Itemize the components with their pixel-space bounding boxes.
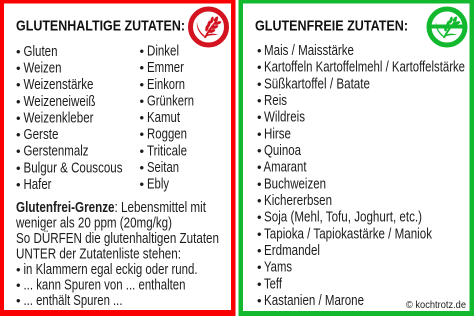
list: glutenfreie Zutaten: • <box>257 226 262 241</box>
list: glutenhaltig column 1: Gerstenmalz <box>24 143 88 160</box>
list: glutenhaltig column 1: • <box>16 44 21 59</box>
list: glutenhaltig column 1: • <box>16 77 21 92</box>
list: glutenhaltig column 2: Grünkern <box>147 92 194 109</box>
list: glutenfreie Zutaten: Teff <box>264 275 283 292</box>
list: glutenhaltig column 1: • <box>16 127 21 142</box>
list: glutenhaltig column 1: Weizen <box>24 60 62 77</box>
list: glutenfreie Zutaten: • <box>257 260 262 275</box>
list: glutenfreie Zutaten: Süßkartoffel / Batate <box>264 75 370 92</box>
panel: glutenhaltige Zutaten <box>0 0 236 316</box>
list: glutenfreie Zutaten: • <box>257 293 262 308</box>
text block: Glutenfrei-Grenze: ... kann Spuren von ... enthalten <box>24 278 186 294</box>
list: glutenhaltig column 1: Gluten <box>24 43 58 60</box>
list: glutenhaltig column 2: • <box>140 177 144 192</box>
list: glutenhaltig column 1: • <box>16 61 21 76</box>
list: glutenfreie Zutaten: • <box>257 243 262 258</box>
panel: glutenfreie Zutaten <box>238 0 474 316</box>
list: glutenfreie Zutaten: Kichererbsen <box>264 192 332 209</box>
list: glutenhaltig column 2: • <box>140 143 144 158</box>
list: glutenfreie Zutaten: • <box>257 76 262 91</box>
list: glutenfreie Zutaten: Buchweizen <box>264 175 326 192</box>
list: glutenfreie Zutaten: Erdmandel <box>264 242 320 259</box>
list: glutenhaltig column 2: Ebly <box>147 176 169 193</box>
list: glutenfreie Zutaten: • <box>257 110 262 125</box>
icon: crossed-out wheat green <box>428 9 466 45</box>
list: glutenfreie Zutaten: • <box>257 193 262 208</box>
list: glutenhaltig column 2: Dinkel <box>147 42 179 60</box>
list: glutenfreie Zutaten: • <box>257 60 262 75</box>
list: glutenhaltig column 2: • <box>140 60 144 75</box>
list: glutenhaltig column 2: • <box>140 93 144 108</box>
list: glutenhaltig column 1: • <box>16 160 21 175</box>
text block: Glutenfrei-Grenze <box>15 200 219 309</box>
list: glutenhaltig column 2: • <box>140 110 144 125</box>
text block: Glutenfrei-Grenze: So DÜRFEN die glutenhaltigen Zutaten <box>16 229 219 247</box>
list: glutenfreie Zutaten <box>257 42 466 311</box>
list: glutenfreie Zutaten: • <box>257 160 262 175</box>
list: glutenhaltig column 2: Emmer <box>147 59 184 76</box>
list: glutenhaltig column 2: Seitan <box>147 159 179 176</box>
list: glutenhaltig column 2: • <box>140 44 144 58</box>
text block: Glutenfrei-Grenze: in Klammern egal eckig oder rund. <box>24 262 198 278</box>
list: glutenhaltig column 2: • <box>140 77 144 92</box>
list: glutenfreie Zutaten: Soja (Mehl, Tofu, Joghurt, etc.) <box>264 209 422 226</box>
list: glutenhaltig column 2: Triticale <box>147 142 187 159</box>
list: glutenhaltig column 1: • <box>16 94 21 109</box>
text block: Glutenfrei-Grenze: • <box>16 262 21 277</box>
heading: glutenfreie Zutaten: GLUTENFREIE ZUTATEN: <box>255 18 408 34</box>
list: glutenfreie Zutaten: Quinoa <box>264 142 301 159</box>
list: glutenhaltig column 1: • <box>16 110 21 126</box>
list: glutenhaltig column 2: • <box>140 160 144 175</box>
list: glutenfreie Zutaten: • <box>257 126 262 141</box>
list: glutenfreie Zutaten: • <box>257 93 262 108</box>
list: glutenhaltig column 1: Weizeneiweiß <box>24 93 96 110</box>
list: glutenhaltig column 2: Einkorn <box>147 76 185 93</box>
copyright: © kochtrotz.de <box>406 299 466 311</box>
list: glutenhaltig column 2 <box>140 42 194 193</box>
list: glutenfreie Zutaten: • <box>257 210 262 225</box>
list: glutenhaltig column 1: Hafer <box>24 176 52 193</box>
list: glutenfreie Zutaten: • <box>257 143 262 158</box>
list: glutenfreie Zutaten: Hirse <box>264 125 291 142</box>
list: glutenfreie Zutaten: • <box>257 276 262 291</box>
list: glutenfreie Zutaten: Yams <box>264 259 292 276</box>
list: glutenfreie Zutaten: Kastanien / Marone <box>264 292 364 309</box>
list: glutenhaltig column 2: Roggen <box>147 126 187 143</box>
list: glutenhaltig column 2: Kamut <box>147 109 181 126</box>
list: glutenfreie Zutaten: Reis <box>264 92 287 109</box>
text block: Glutenfrei-Grenze: weniger als 20 ppm (20mg/kg) <box>15 216 172 232</box>
list: glutenhaltig column 1: Weizenkleber <box>24 110 94 126</box>
list: glutenhaltig column 1: Bulgur & Couscous <box>24 159 122 176</box>
text block: Glutenfrei-Grenze: • <box>16 278 21 292</box>
list: glutenhaltig column 2: • <box>140 127 144 142</box>
heading: glutenhaltige Zutaten: GLUTENHALTIGE ZUTATEN: <box>16 18 185 34</box>
list: glutenhaltig column 1: • <box>16 144 21 159</box>
list: glutenhaltig column 1: • <box>16 177 21 192</box>
icon: crossed-out wheat red <box>190 9 226 45</box>
text block: Glutenfrei-Grenze: ... enthält Spuren ... <box>24 293 122 309</box>
list: glutenfreie Zutaten: • <box>257 43 262 58</box>
list: glutenhaltig column 1: Gerste <box>24 126 58 143</box>
list: glutenfreie Zutaten: • <box>257 176 262 191</box>
text block: Glutenfrei-Grenze: Glutenfrei-Grenze: Lebensmittel mit <box>16 200 206 216</box>
list: glutenfreie Zutaten: Mais / Maisstärke <box>264 42 354 59</box>
text block: Glutenfrei-Grenze: • <box>16 293 21 308</box>
text block: Glutenfrei-Grenze: UNTER der Zutatenliste stehen: <box>16 247 181 263</box>
list: glutenfreie Zutaten: Wildreis <box>264 109 305 126</box>
list: glutenhaltig column 1: Weizenstärke <box>24 76 94 93</box>
list: glutenfreie Zutaten: Amarant <box>264 159 307 176</box>
list: glutenhaltig column 1 <box>16 43 122 193</box>
